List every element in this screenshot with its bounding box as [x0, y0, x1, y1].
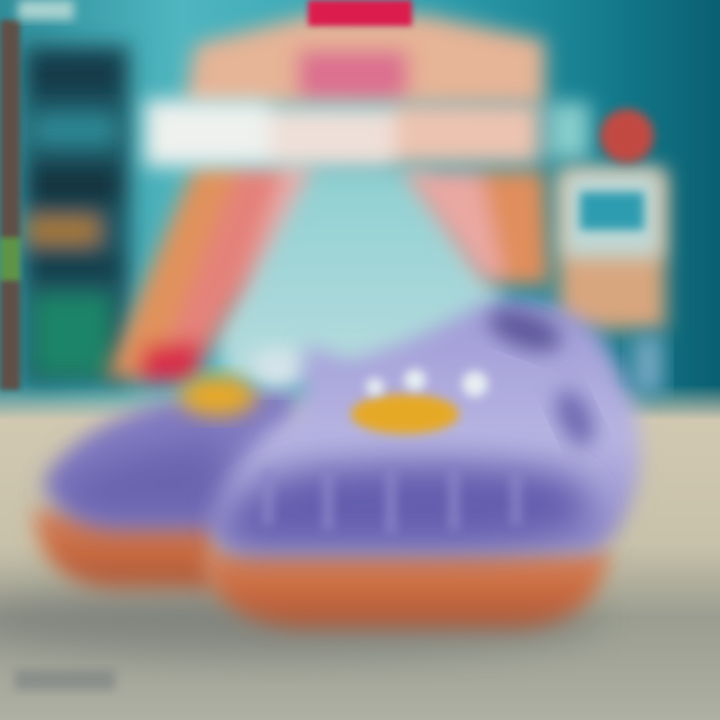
left curtain — [105, 165, 312, 382]
right slipper opening — [483, 300, 567, 360]
banner peach panel — [185, 15, 545, 105]
banner and curtains — [105, 0, 590, 382]
corner logo smudge — [15, 670, 115, 690]
background wall — [0, 0, 720, 430]
right slipper fringe — [222, 464, 591, 545]
right slipper side strap — [548, 384, 602, 452]
right slipper yellow patch — [351, 394, 459, 434]
left shelf post — [0, 20, 20, 390]
banner white title band — [145, 100, 590, 168]
left slipper white dots — [250, 348, 306, 388]
left slipper — [34, 348, 306, 588]
right slipper — [202, 300, 640, 628]
left shelves — [24, 45, 130, 385]
right box with red circle — [558, 109, 666, 395]
left slipper sole — [34, 510, 215, 588]
centre backdrop — [215, 170, 505, 380]
left slipper yellow patch — [180, 376, 256, 416]
right slipper upper — [212, 301, 640, 552]
floor shadow — [0, 584, 600, 656]
right slipper white dots — [366, 369, 488, 397]
right curtain — [400, 170, 550, 285]
right slipper fringe highlights — [262, 468, 522, 533]
right slipper sole — [202, 550, 610, 628]
top left light patch — [18, 0, 74, 20]
banner red top — [308, 0, 412, 26]
left slipper upper — [44, 385, 300, 528]
